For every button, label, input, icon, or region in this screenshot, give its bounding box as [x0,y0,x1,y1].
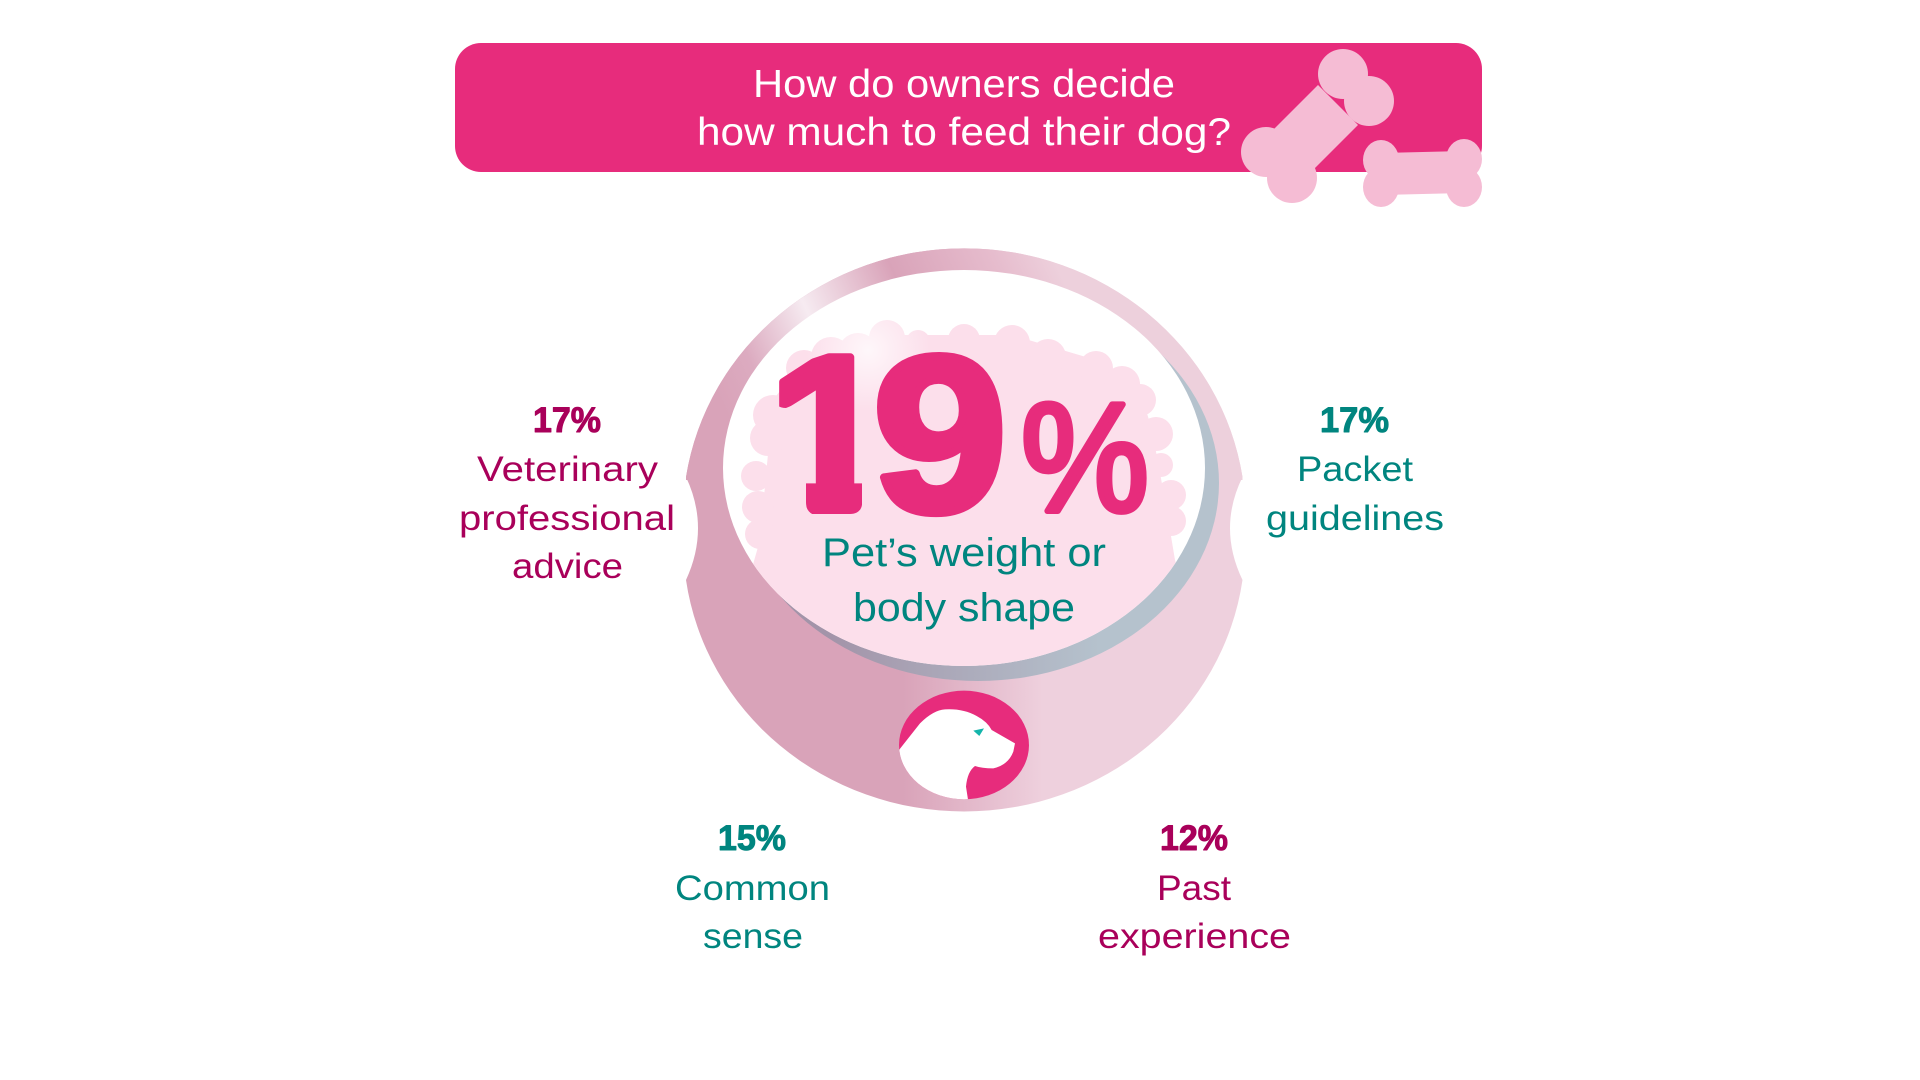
big number 19% [779,352,1147,518]
dog bowl [686,248,1242,811]
main label: pet's weight or body shape [822,531,1106,630]
stat: 15% common sense [675,819,830,956]
dog food [741,320,1186,666]
title text: how much to feed their dog? [697,111,1231,154]
icon: small bone [1363,139,1482,207]
bowl interior [723,270,1205,666]
stat: 17% packet guidelines: 17% [1320,401,1389,440]
stat: 15% common sense: 15% [718,819,786,858]
main label: pet's weight or body shape: body shape [853,586,1075,630]
title text: How do owners decide [753,63,1175,106]
icon: large bone [1241,49,1394,203]
stat: 17% packet guidelines [1266,401,1444,538]
stat: 17% veterinary professional advice: Veterinary [477,450,659,489]
icon: dog head badge [893,691,1029,802]
bowl body [686,248,1242,811]
stat: 17% packet guidelines: guidelines [1266,499,1444,538]
stat: 12% past experience: experience [1098,917,1291,956]
bowl inner shadow [737,285,1219,681]
stat: 12% past experience [1098,819,1291,956]
big number 19%: % [1021,371,1149,544]
stat: 15% common sense: sense [703,917,803,956]
stat: 17% packet guidelines: Packet [1297,450,1413,489]
stat: 17% veterinary professional advice: advice [512,547,623,586]
stat: 17% veterinary professional advice: professional [459,499,675,538]
stat: 17% veterinary professional advice: 17% [533,401,601,440]
stat: 12% past experience: 12% [1160,819,1228,858]
bowl rim [686,248,1242,490]
stat: 15% common sense: Common [675,869,830,908]
stat: 12% past experience: Past [1157,869,1231,908]
main label: pet's weight or body shape: Pet’s weight or [822,531,1106,575]
title banner [455,43,1482,172]
big number 19%: 9 [873,311,1007,559]
stat: 17% veterinary professional advice [459,401,675,586]
title text [697,63,1231,154]
big number 19%: 1 [768,310,891,558]
